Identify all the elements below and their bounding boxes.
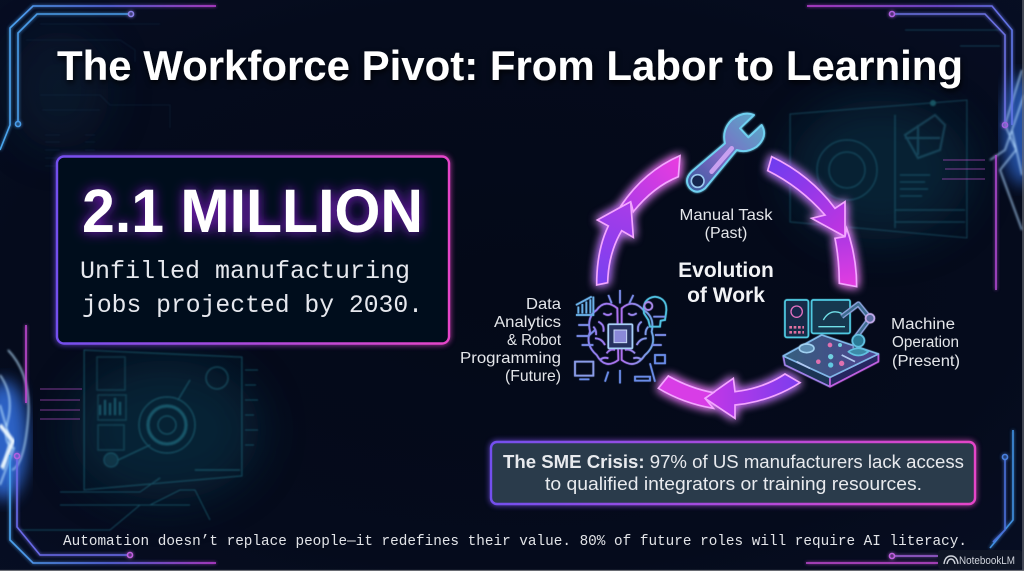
callout: SME crisis: to qualified integrators or training resources. <box>545 474 922 494</box>
label: machine operation: Operation <box>892 334 959 351</box>
label: data analytics and robot programming <box>460 296 562 385</box>
watermark: NotebookLM: NotebookLM <box>959 555 1015 567</box>
lightning glow: left edge <box>0 350 29 500</box>
HUD pink data lines right <box>942 160 985 179</box>
label: data analytics and robot programming: & Robot <box>507 332 562 349</box>
panel: 2.1 million stat <box>57 156 449 344</box>
icon: wrench <box>687 114 764 192</box>
label: manual task <box>680 207 774 242</box>
label: manual task: Manual Task <box>680 207 774 224</box>
center label: evolution of work <box>678 259 774 307</box>
label: machine operation <box>891 316 960 370</box>
center label: evolution of work: of Work <box>687 284 765 307</box>
lightning glow: right edge <box>990 70 1024 230</box>
label: data analytics and robot programming: Data <box>526 296 561 313</box>
label: manual task: (Past) <box>705 225 747 242</box>
stat number: 2.1 MILLION <box>82 177 423 245</box>
faint circuit traces top left <box>26 24 170 166</box>
label: data analytics and robot programming: Analytics <box>494 314 561 331</box>
title: The Workforce Pivot: From Labor to Learning <box>57 42 963 89</box>
HUD panel: upper right <box>790 30 1000 238</box>
callout: SME crisis: The SME Crisis: 97% of US manufacturers lack access <box>503 452 964 472</box>
callout: SME crisis <box>491 442 975 504</box>
label: data analytics and robot programming: Programming <box>460 350 561 367</box>
HUD panel: lower left <box>20 350 258 530</box>
ambient teal haze behind HUD panels <box>10 30 970 500</box>
stat description: jobs projected by 2030. <box>82 291 423 320</box>
icon: brain and chip <box>575 290 666 383</box>
label: machine operation: Machine <box>891 316 955 333</box>
label: machine operation: (Present) <box>892 353 960 370</box>
icon: robot control console <box>783 300 878 387</box>
HUD pink data lines left <box>40 389 82 419</box>
footer takeaway: Automation doesn’t replace people—it redefines their value. 80% of future roles will require AI literacy. <box>63 534 967 550</box>
label: data analytics and robot programming: (Future) <box>505 368 561 385</box>
stat description: Unfilled manufacturing <box>80 257 410 286</box>
stat description <box>80 257 423 320</box>
center label: evolution of work: Evolution <box>678 259 774 282</box>
arrows of the cycle <box>597 156 857 418</box>
cycle diagram: evolution of work <box>460 114 960 418</box>
watermark: NotebookLM <box>938 550 1022 569</box>
